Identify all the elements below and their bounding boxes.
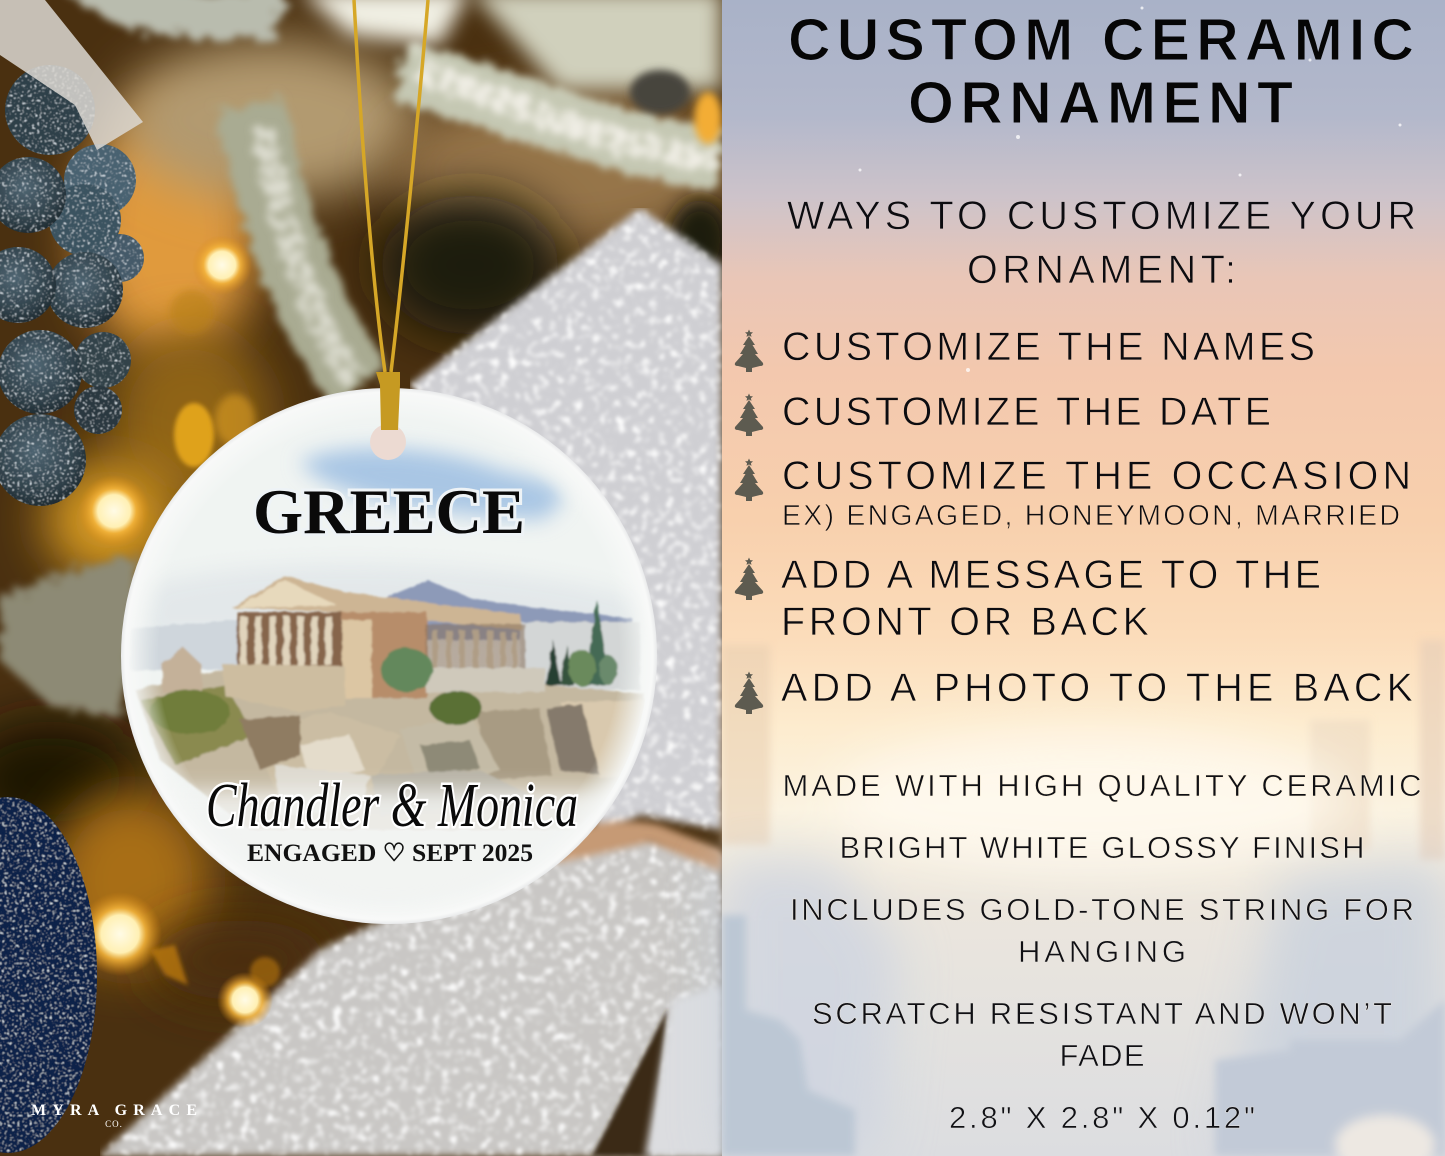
list item: occasion <box>782 454 1411 532</box>
panel: product details <box>722 0 1445 1156</box>
title: ORNAMENT <box>908 70 1293 136</box>
product specifications: MADE WITH HIGH QUALITY CERAMIC <box>782 768 1422 803</box>
ornament caption: ENGAGED ♡ SEPT 2025 <box>247 840 533 867</box>
title: CUSTOM CERAMIC <box>788 7 1414 73</box>
icon: tree bullet <box>735 558 763 600</box>
product specifications <box>782 768 1422 1135</box>
icon: tree bullet <box>735 394 763 436</box>
product specifications: SCRATCH RESISTANT AND WON’T <box>812 996 1392 1031</box>
bokeh lights <box>78 92 722 1028</box>
organza bow <box>0 0 143 150</box>
hanging hole <box>370 424 406 460</box>
photo background: blurred Christmas tree <box>0 0 730 1156</box>
frosted pine branches <box>0 0 722 720</box>
list item: message: FRONT OR BACK <box>781 600 1149 644</box>
product specifications: HANGING <box>1018 934 1186 969</box>
product specifications: FADE <box>1060 1038 1144 1073</box>
dark glitter baubles <box>0 65 144 506</box>
list item: names: CUSTOMIZE THE NAMES <box>782 325 1315 369</box>
subheading: WAYS TO CUSTOMIZE YOUR <box>787 194 1416 238</box>
subheading: ORNAMENT: <box>967 248 1236 292</box>
gold string <box>354 0 428 372</box>
title <box>788 7 1414 136</box>
product specifications: BRIGHT WHITE GLOSSY FINISH <box>840 830 1364 865</box>
product specifications: INCLUDES GOLD-TONE STRING FOR <box>790 892 1414 927</box>
watermark <box>31 1104 196 1127</box>
icon: tree bullet <box>735 672 763 714</box>
ornament headline: GREECE <box>253 477 525 547</box>
watermark: MYRA GRACE <box>31 1102 197 1119</box>
icon: tree bullet <box>735 330 763 372</box>
sparkle dots <box>858 6 1402 372</box>
product specifications: 2.8" X 2.8" X 0.12" <box>949 1100 1255 1135</box>
icon: tree bullet <box>735 458 763 501</box>
list item: message: ADD A MESSAGE TO THE <box>781 553 1321 597</box>
ornament names: Chandler & Monica <box>206 772 578 840</box>
list item: photo: ADD A PHOTO TO THE BACK <box>781 666 1413 710</box>
silver glitter ribbon <box>100 208 722 1156</box>
watermark: CO. <box>105 1119 123 1129</box>
ceramic ornament <box>120 372 660 930</box>
list item: message <box>781 553 1321 644</box>
string knot <box>376 372 400 430</box>
list item: date: CUSTOMIZE THE DATE <box>782 390 1271 434</box>
ornament artwork <box>133 436 644 830</box>
subheading <box>787 194 1416 292</box>
list item: occasion: CUSTOMIZE THE OCCASION <box>782 454 1411 498</box>
list item: occasion: EX) ENGAGED, HONEYMOON, MARRIED <box>782 500 1400 532</box>
blue bauble <box>0 797 97 1153</box>
customization list <box>781 325 1413 710</box>
faint watercolor city silhouette <box>722 640 1445 1156</box>
